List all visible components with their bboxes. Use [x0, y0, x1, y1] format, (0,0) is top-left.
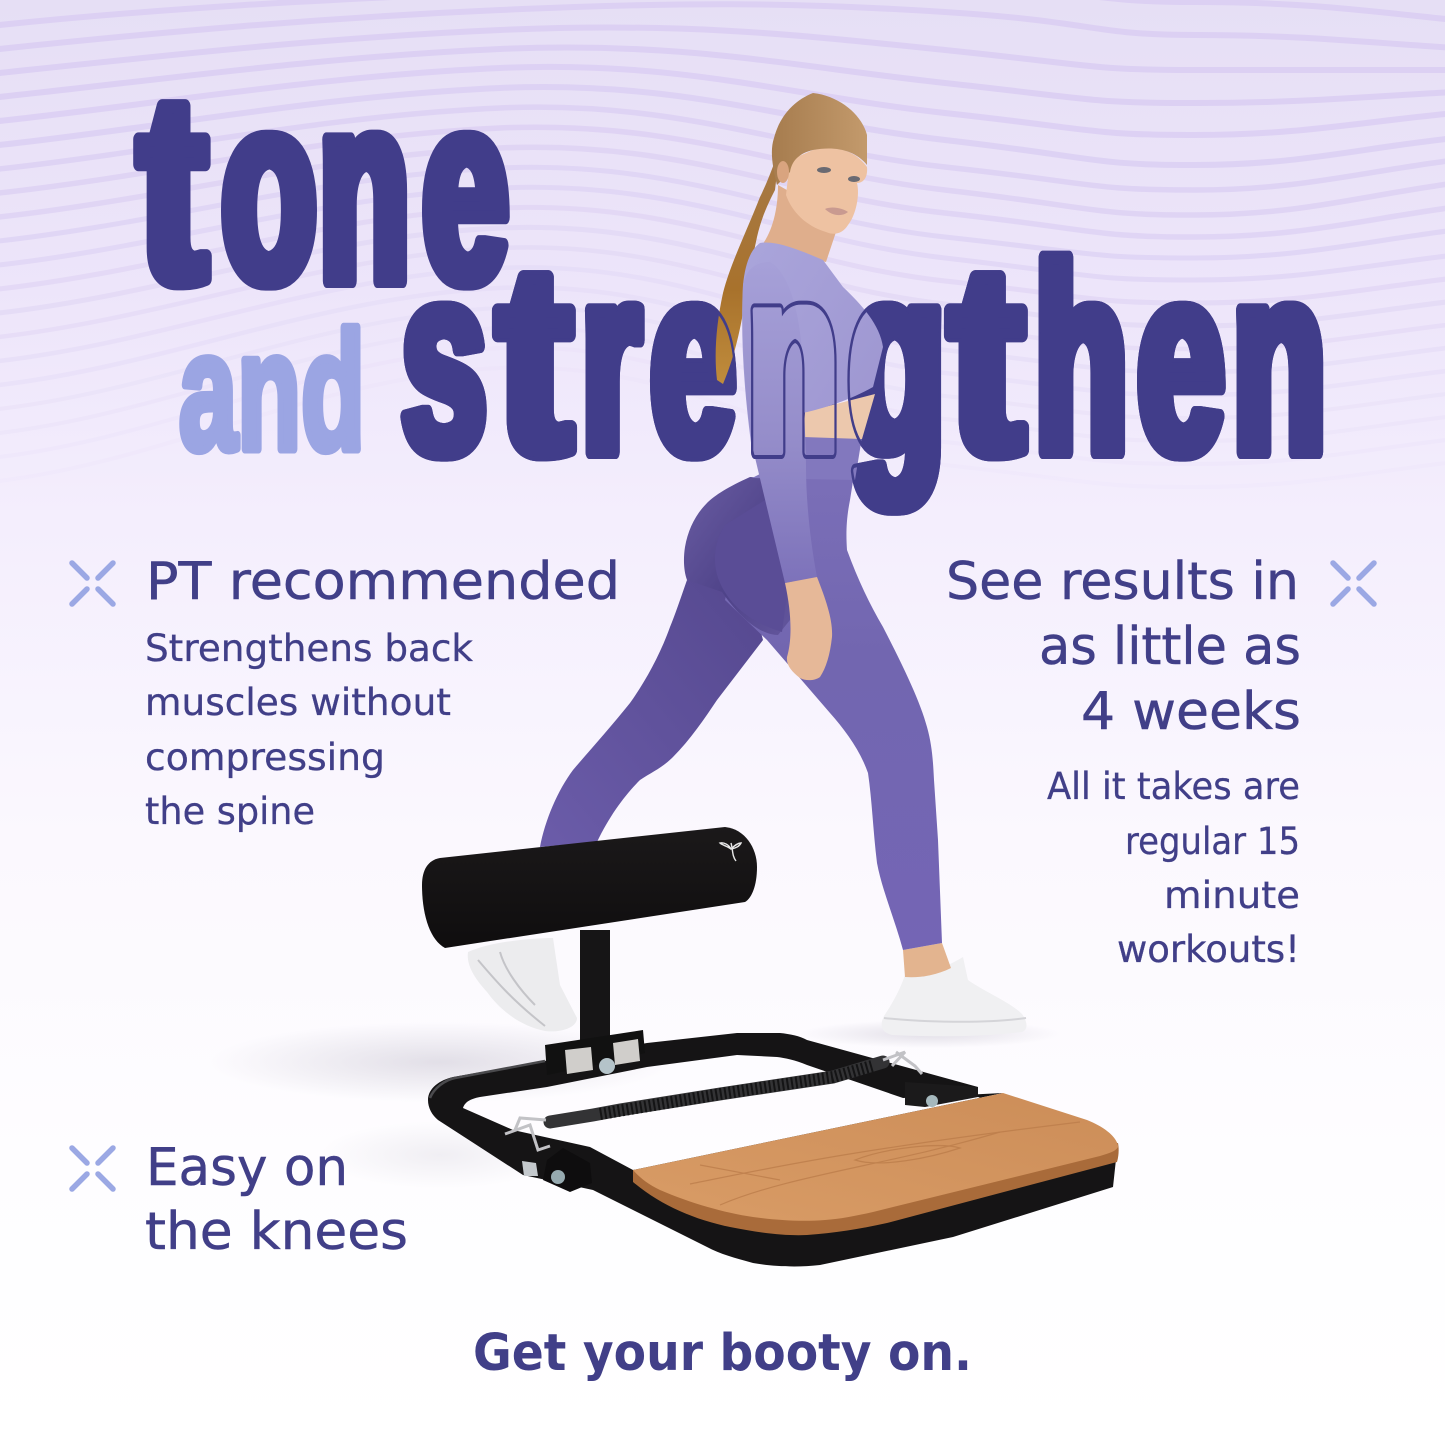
- description: minute: [1164, 874, 1300, 917]
- post base block: [545, 1030, 645, 1075]
- eyes and lips: [817, 167, 860, 215]
- outline of strengthen letters over the woman: g: [848, 209, 945, 511]
- roller post: [580, 930, 610, 1040]
- resistance band: [550, 1062, 883, 1122]
- description: [145, 627, 474, 833]
- title word: strengthen: t: [498, 209, 571, 509]
- heading: the knees: [145, 1202, 408, 1262]
- roller pad: [422, 827, 757, 948]
- outline of strengthen letters over the woman: e: [651, 209, 735, 509]
- description: muscles without: [145, 681, 451, 724]
- title word: tone: e: [423, 38, 508, 338]
- heading: Easy on: [146, 1138, 348, 1198]
- bare waist: [803, 394, 875, 439]
- crop top: [742, 242, 883, 470]
- outline of strengthen letters over the woman: h: [1035, 209, 1128, 509]
- title word: strengthen: r: [582, 209, 640, 509]
- legging waistband: [752, 435, 862, 480]
- ear: [777, 161, 789, 183]
- wooden foot plate: [633, 1093, 1118, 1221]
- title word: strengthen: h: [1035, 209, 1128, 509]
- title word: strengthen: g: [848, 209, 945, 511]
- description: All it takes are: [1047, 765, 1300, 808]
- heading: [145, 1138, 408, 1262]
- description: regular 15: [1125, 820, 1300, 863]
- left end bracket: [522, 1148, 592, 1192]
- wood grain: [690, 1122, 1080, 1205]
- icon: cross marker: [1333, 563, 1374, 604]
- hair: [772, 93, 867, 185]
- outline of strengthen letters over the woman: r: [582, 209, 640, 509]
- title word: strengthen: t: [950, 209, 1023, 509]
- title word: strengthen: e: [651, 209, 735, 509]
- ponytail: [716, 147, 780, 384]
- title word: tone: o: [222, 38, 316, 338]
- heading: PT recommended: [146, 552, 620, 612]
- callout: see results: [946, 552, 1374, 971]
- outline of strengthen letters over the woman: t: [950, 209, 1023, 509]
- photo: woman in lunge: [468, 93, 1026, 1036]
- icon: cross marker: [72, 1148, 113, 1189]
- band clips: [505, 1052, 922, 1150]
- title word: and: and: [179, 297, 365, 485]
- heading: [946, 552, 1301, 742]
- product: hip thrust machine: [422, 827, 1119, 1266]
- hips: [684, 477, 800, 635]
- hand: [785, 577, 832, 680]
- outline of strengthen letters over the woman: t: [498, 209, 571, 509]
- glute shading: [715, 500, 790, 632]
- title word: tone: t: [139, 38, 206, 338]
- tagline: Get your booty on.: [473, 1324, 972, 1383]
- rail highlight: [430, 1061, 545, 1098]
- description: [1047, 765, 1300, 971]
- front shoe: [882, 957, 1026, 1036]
- callout: easy on the knees: [72, 1138, 408, 1262]
- title word: strengthen: s: [402, 209, 486, 509]
- outline of strengthen letters over the woman: e: [1138, 209, 1224, 509]
- sleeve and forearm: [742, 262, 817, 583]
- right end bracket: [905, 1082, 978, 1107]
- steel frame: [428, 1033, 1117, 1266]
- back leg: [540, 580, 763, 847]
- head: [786, 148, 867, 234]
- heading: as little as: [1039, 617, 1301, 677]
- back shoe tread: [478, 952, 545, 1026]
- hinges and bolt: [565, 1039, 640, 1074]
- title word: strengthen: e: [1138, 209, 1224, 509]
- wooden foot plate edge: [633, 1143, 1119, 1235]
- title word: strengthen: n: [1233, 209, 1326, 509]
- neck: [762, 185, 840, 262]
- heading: See results in: [946, 552, 1299, 612]
- title word: strengthen: n: [748, 209, 839, 509]
- back shoe: [468, 938, 577, 1031]
- outline of strengthen letters over the woman: s: [402, 209, 486, 509]
- floor shadows: [210, 1020, 1060, 1189]
- front leg: [725, 462, 942, 950]
- icon: cross marker: [72, 563, 113, 604]
- ankle: [903, 943, 951, 977]
- outline of strengthen letters over the woman: n: [1233, 209, 1326, 509]
- heading: 4 weeks: [1081, 682, 1301, 742]
- description: compressing: [145, 736, 385, 779]
- description: the spine: [145, 790, 315, 833]
- description: Strengthens back: [145, 627, 474, 670]
- outline of strengthen letters over the woman: n: [748, 209, 839, 509]
- wavy line background pattern: [0, 0, 1445, 487]
- callout: PT recommended: [72, 552, 620, 833]
- title word: tone: n: [319, 38, 409, 338]
- description: workouts!: [1117, 928, 1300, 971]
- front shoe sole: [884, 1018, 1026, 1022]
- logo on roller: [720, 843, 741, 861]
